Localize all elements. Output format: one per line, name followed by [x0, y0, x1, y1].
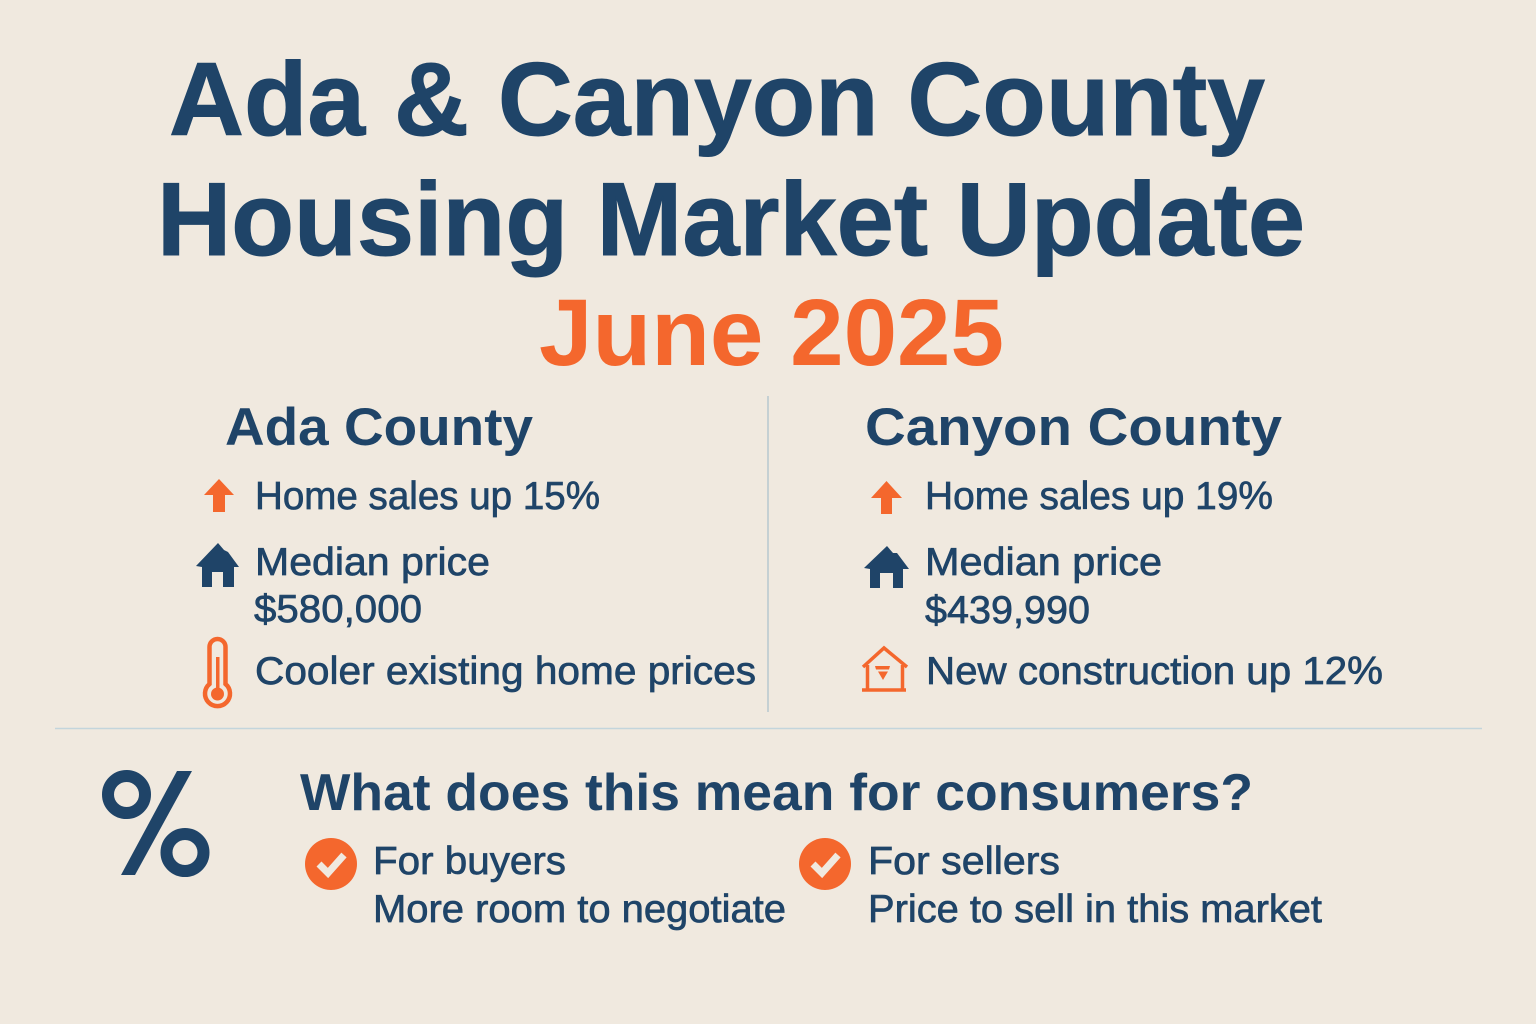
icon: check sellers — [799, 838, 851, 890]
text: median price: Median price — [255, 541, 490, 584]
icon: house — [196, 543, 239, 587]
title: Ada & Canyon County — [169, 42, 1265, 158]
title — [157, 42, 1305, 278]
text: home sales: Home sales up 15% — [255, 475, 600, 518]
text: home sales: Home sales up 19% — [925, 475, 1273, 518]
panel: Canyon County — [862, 398, 1383, 693]
title: Housing Market Update — [157, 162, 1305, 278]
heading: Ada County: Ada County — [225, 398, 534, 457]
subtitle: date: June 2025 — [539, 280, 1004, 386]
text: for sellers: Price to sell in this market — [868, 888, 1322, 931]
icon: up arrow — [204, 479, 234, 512]
panel: Ada County — [196, 398, 756, 706]
text: median price: $439,990 — [925, 589, 1090, 632]
icon: check buyers — [305, 838, 357, 890]
heading: Canyon County: Canyon County — [865, 398, 1283, 457]
icon: percent — [108, 771, 204, 875]
text: median price — [254, 541, 490, 631]
text: median price: $580,000 — [254, 588, 422, 631]
text: for buyers: More room to negotiate — [373, 888, 786, 931]
text: for sellers — [868, 840, 1322, 931]
text: for buyers — [373, 840, 786, 931]
icon: thermometer — [205, 639, 230, 706]
text: median price: Median price — [925, 541, 1162, 584]
icon: new construction house — [862, 648, 907, 690]
text: for buyers: For buyers — [373, 840, 566, 883]
text: existing home prices: Cooler existing home prices — [255, 650, 756, 693]
icon: house — [864, 546, 909, 588]
icon: up arrow — [871, 481, 902, 514]
text: for sellers: For sellers — [868, 840, 1060, 883]
text: median price — [925, 541, 1162, 632]
heading: consumers: What does this mean for consumers? — [300, 764, 1253, 822]
text: new construction: New construction up 12% — [926, 650, 1383, 693]
panel: consumers — [300, 764, 1322, 931]
